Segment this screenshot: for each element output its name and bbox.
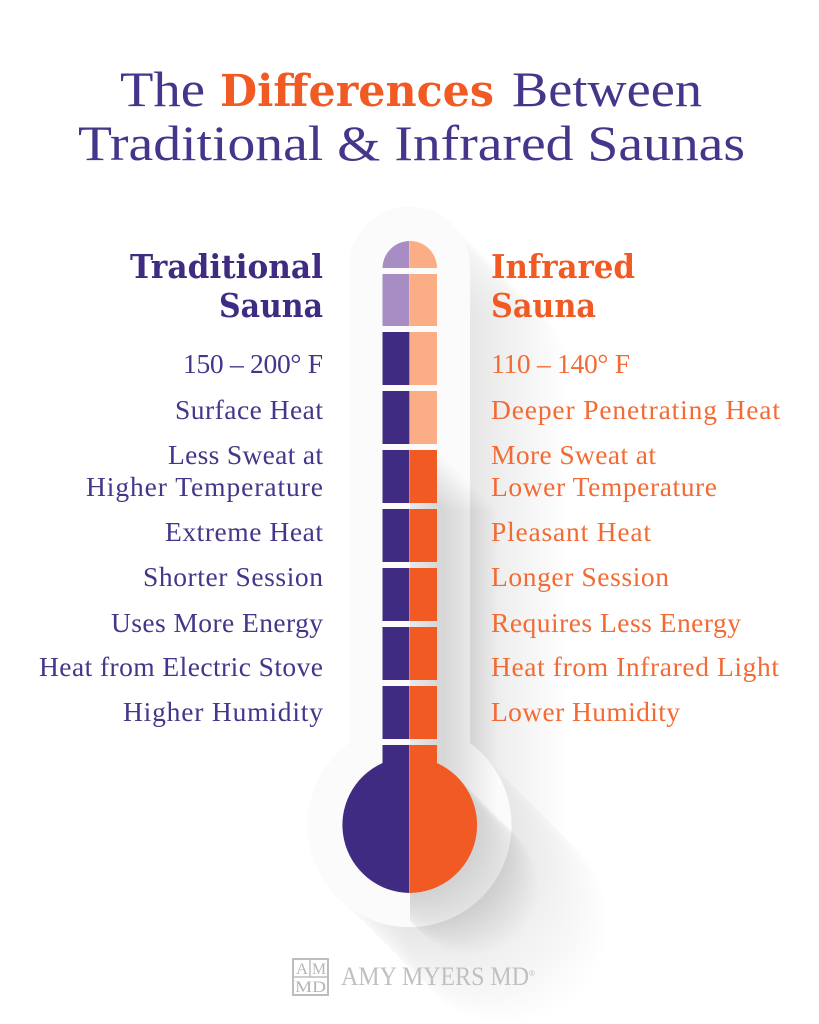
heading: Infrared Sauna: Infrared [491, 247, 635, 286]
infrared sauna list: 110 – 140° F [491, 348, 630, 379]
infrared sauna list: Heat from Infrared Light [491, 651, 779, 682]
infrared sauna list: Longer Session [491, 561, 669, 592]
title: Traditional & Infrared Saunas [78, 115, 745, 171]
icon: AM MD monogram: MD [295, 979, 326, 996]
traditional sauna list: Shorter Session [143, 561, 323, 592]
traditional sauna list: Surface Heat [175, 394, 323, 425]
thermometer white body [308, 206, 512, 927]
traditional sauna list: Uses More Energy [111, 607, 323, 638]
traditional sauna list: Higher Temperature [86, 471, 323, 502]
traditional sauna list: Heat from Electric Stove [39, 651, 323, 682]
heading: Traditional Sauna: Traditional [130, 247, 323, 286]
traditional sauna list: Extreme Heat [165, 516, 323, 547]
icon: AM MD monogram [293, 959, 328, 996]
heading: Infrared Sauna [491, 247, 635, 325]
traditional sauna list: 150 – 200° F [183, 348, 323, 379]
title [78, 61, 745, 171]
infrared sauna list [491, 348, 780, 727]
icon: AM MD monogram: M [312, 961, 326, 978]
infrared sauna list: Requires Less Energy [491, 607, 741, 638]
inner shadow of color column [410, 465, 526, 942]
infrared sauna list: Lower Humidity [491, 696, 680, 727]
registered mark: ® [529, 969, 535, 978]
thermometer bulb [342, 745, 477, 893]
icon: AM MD monogram: A [296, 961, 308, 978]
title: Between [512, 61, 702, 117]
title: The [120, 61, 205, 117]
infrared sauna list: Deeper Penetrating Heat [491, 394, 780, 425]
long drop shadow of thermometer [312, 210, 608, 1023]
traditional sauna list: Higher Humidity [123, 696, 323, 727]
heading: Traditional Sauna [130, 247, 323, 325]
infrared sauna list: More Sweat at [491, 439, 656, 470]
title: Differences [220, 66, 494, 117]
logo: Amy Myers MD [293, 959, 535, 996]
logo wordmark: AMY MYERS MD [341, 962, 529, 991]
infrared sauna list: Pleasant Heat [491, 516, 651, 547]
traditional sauna list [39, 348, 323, 727]
infrared sauna list: Lower Temperature [491, 471, 717, 502]
thermometer column right: infrared [410, 241, 437, 739]
thermometer column left: traditional [382, 241, 410, 739]
traditional sauna list: Less Sweat at [168, 439, 323, 470]
heading: Traditional Sauna: Sauna [219, 286, 323, 325]
heading: Infrared Sauna: Sauna [491, 286, 596, 325]
